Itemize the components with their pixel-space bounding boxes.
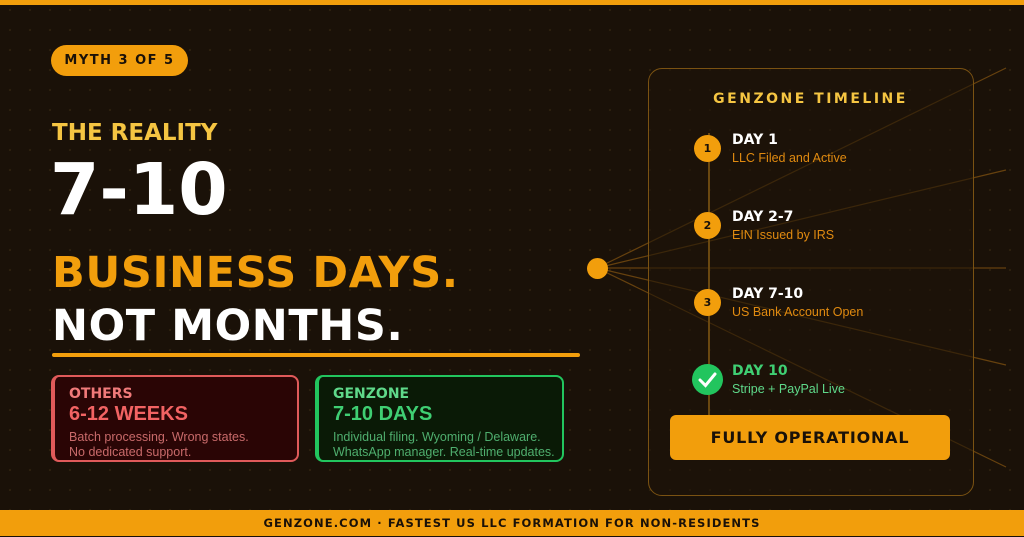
heading: the reality: THE REALITY (52, 120, 217, 146)
label others: OTHERS (69, 386, 133, 402)
desc others: Batch processing. Wrong states. (69, 430, 249, 444)
label genzone: GENZONE (333, 386, 409, 402)
step 4: Stripe + PayPal Live (732, 382, 845, 396)
panel: others (51, 375, 299, 462)
desc genzone: Individual filing. Wyoming / Delaware. (333, 430, 541, 444)
headline: business days: BUSINESS DAYS. (52, 248, 459, 298)
step 1: LLC Filed and Active (732, 151, 847, 165)
step 2: 2 (704, 219, 711, 232)
big number: 7-10 (50, 148, 228, 231)
timeline title: GENZONE TIMELINE (713, 91, 908, 107)
button: fully operational (670, 415, 950, 460)
step 4: DAY 10 (732, 363, 788, 379)
step 1 (694, 132, 847, 165)
desc genzone: WhatsApp manager. Real-time updates. (333, 445, 555, 459)
panel: genzone (315, 375, 564, 462)
footer (0, 510, 1024, 536)
desc genzone (333, 430, 555, 459)
step 4 (692, 363, 845, 396)
desc others (69, 430, 249, 459)
footer: GENZONE.COM · FASTEST US LLC FORMATION FOR NON-RESIDENTS (264, 516, 760, 530)
step 2: DAY 2-7 (732, 209, 793, 225)
step 2 (694, 209, 834, 242)
step 2: EIN Issued by IRS (732, 228, 834, 242)
badge: myth 3 of 5: MYTH 3 OF 5 (64, 53, 175, 68)
button: fully operational: FULLY OPERATIONAL (711, 428, 909, 447)
icon: hub dot (587, 258, 608, 279)
headline: not months: NOT MONTHS. (52, 301, 403, 351)
step 1: 1 (704, 142, 711, 155)
badge: myth 3 of 5 (51, 45, 188, 76)
value genzone: 7-10 DAYS (333, 403, 432, 425)
step 1: DAY 1 (732, 132, 778, 148)
step 3: 3 (704, 296, 711, 309)
step 3: DAY 7-10 (732, 286, 803, 302)
step 3: US Bank Account Open (732, 305, 863, 319)
desc others: No dedicated support. (69, 445, 191, 459)
panel: timeline (648, 68, 974, 496)
step 3 (694, 286, 863, 319)
value others: 6-12 WEEKS (69, 403, 188, 425)
